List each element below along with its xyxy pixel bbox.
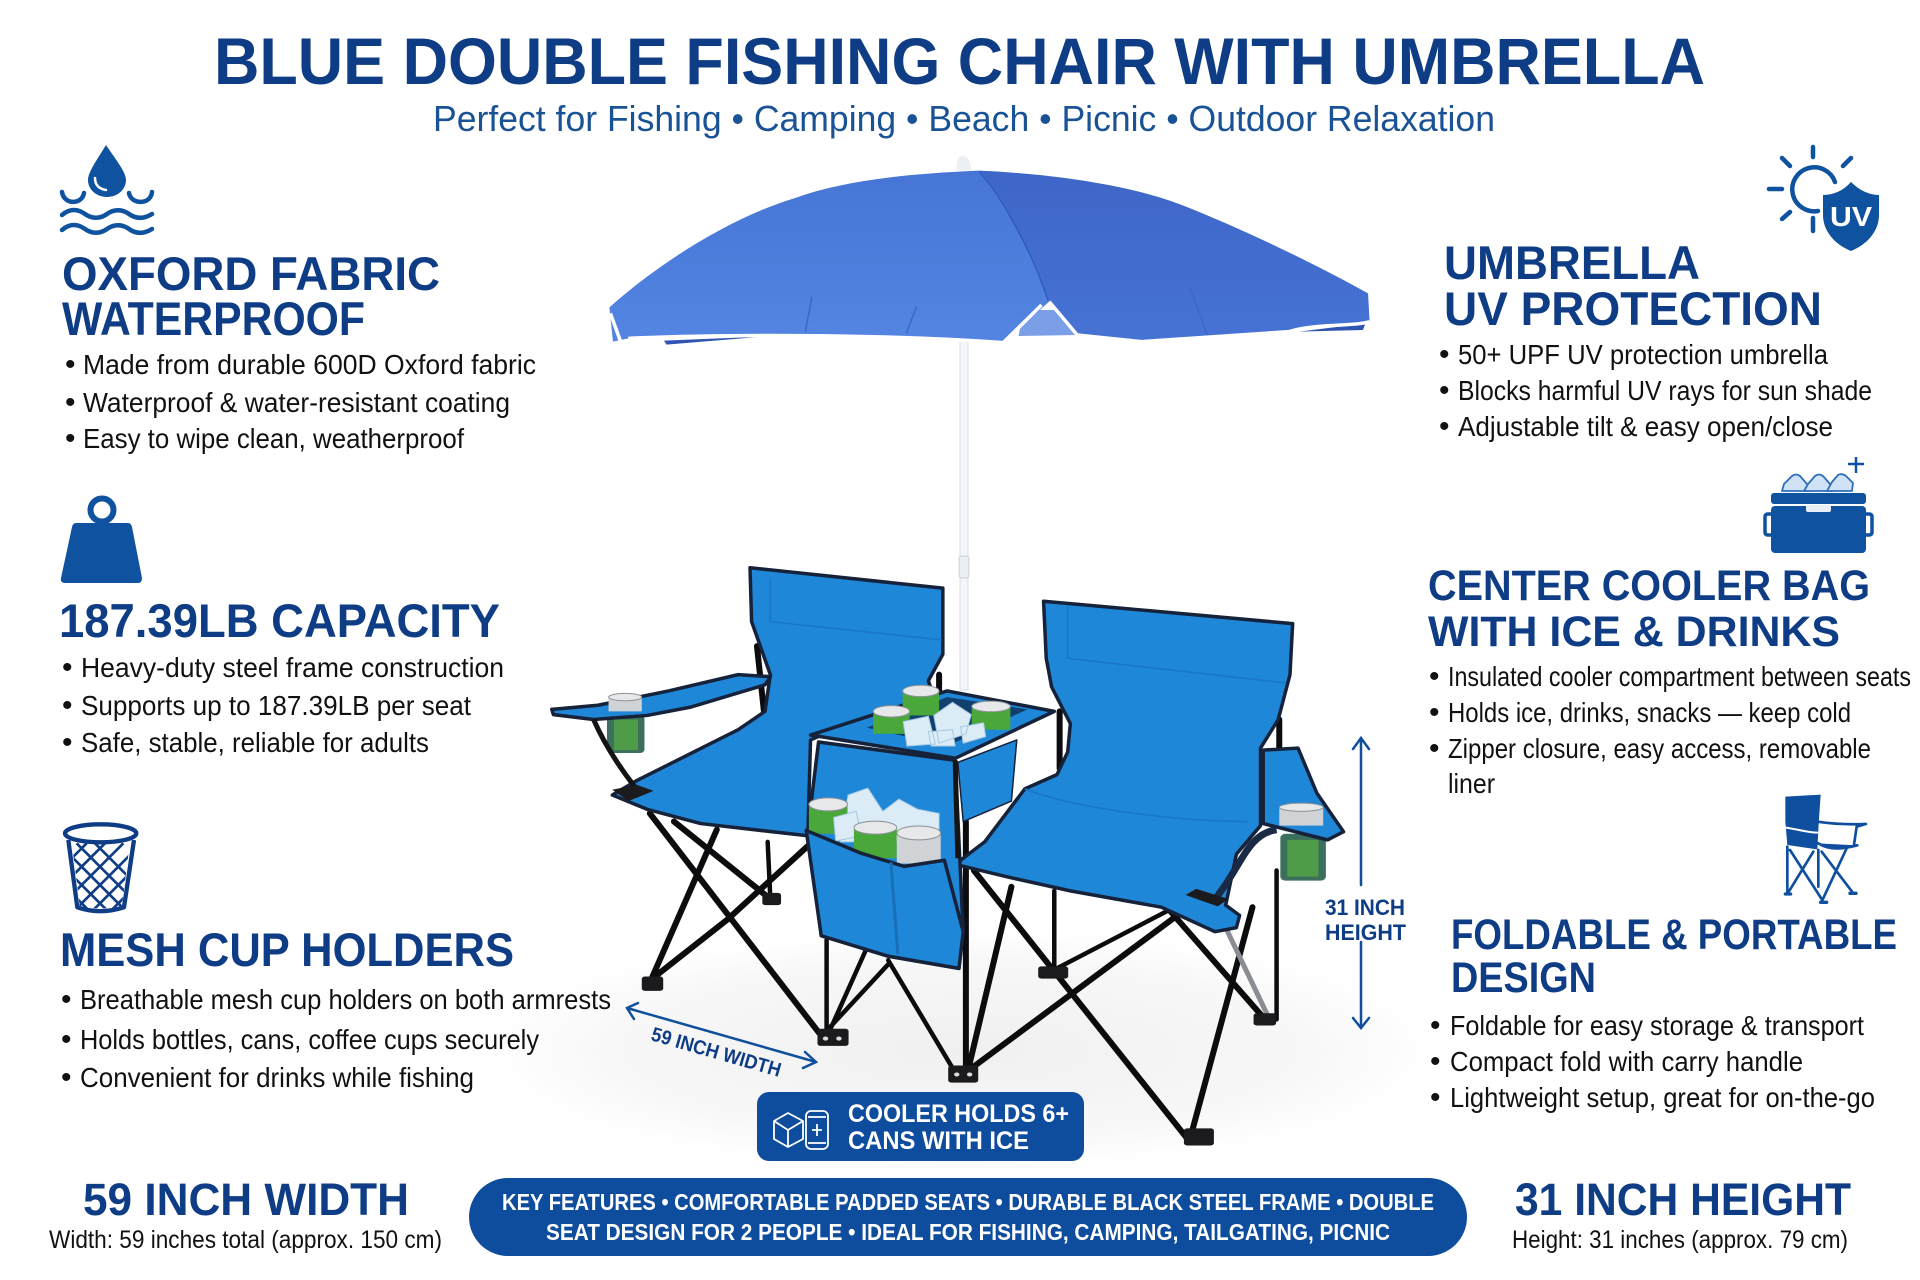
label: 31 inch height — [1325, 895, 1407, 945]
stat: height: Height: 31 inches (approx. 79 cm) — [1512, 1226, 1848, 1254]
bullet list: Safe, stable, reliable for adults — [81, 727, 429, 758]
bullet list: Foldable for easy storage & transport — [1450, 1010, 1864, 1041]
bullet list: • — [1429, 660, 1440, 693]
heading: WITH ICE & DRINKS — [1428, 608, 1840, 656]
heading: DESIGN — [1451, 954, 1596, 1002]
panel: capacity — [59, 498, 504, 759]
panel: center cooler bag — [1428, 457, 1911, 799]
heading — [1451, 911, 1897, 1002]
bullet list: • — [1439, 338, 1450, 371]
bullet list: • — [1439, 374, 1450, 407]
heading: UMBRELLA — [1444, 236, 1700, 289]
bullet list: • — [1429, 732, 1440, 765]
bullet list — [1429, 660, 1911, 799]
stat: width — [49, 1174, 442, 1254]
left can — [609, 693, 642, 711]
icon: sun with UV shield — [1769, 147, 1879, 251]
bullet list: • — [61, 1061, 72, 1094]
icon: weight — [61, 498, 142, 583]
cooler body — [808, 742, 963, 968]
umbrella canopy — [609, 156, 1370, 345]
panel: foldable and portable — [1430, 795, 1897, 1114]
banner: key features — [469, 1178, 1467, 1256]
bullet list: Convenient for drinks while fishing — [80, 1062, 474, 1093]
bullet list: • — [65, 422, 76, 455]
icon: sun with UV shield: UV — [1830, 201, 1872, 232]
panel: umbrella uv protection — [1439, 147, 1879, 443]
stat: height — [1512, 1174, 1851, 1254]
bullet list: Lightweight setup, great for on-the-go — [1450, 1082, 1875, 1113]
bullet list: Holds ice, drinks, snacks — keep cold — [1448, 697, 1851, 728]
panel: oxford fabric waterproof — [62, 145, 536, 455]
bullet list: • — [1429, 696, 1440, 729]
cooler opening with cans and ice — [867, 685, 1027, 746]
stat: height: 31 INCH HEIGHT — [1515, 1174, 1851, 1225]
icon: water drop over waves — [62, 145, 152, 233]
panel: mesh cup holders — [3, 824, 611, 1094]
arrow: height dimension — [1353, 738, 1369, 1028]
bullet list: • — [62, 689, 73, 722]
bullet list: • — [1430, 1081, 1441, 1114]
icon: ice cube and can — [774, 1111, 828, 1149]
banner: key features: SEAT DESIGN FOR 2 PEOPLE • IDEAL FOR FISHING, CAMPING, TAILGATING, PICNIC — [546, 1219, 1390, 1245]
bullet list: Blocks harmful UV rays for sun shade — [1458, 375, 1872, 406]
bullet list: • — [65, 386, 76, 419]
bullet list: • — [1439, 410, 1450, 443]
heading — [1444, 236, 1822, 335]
right armrest — [1263, 748, 1344, 840]
bullet list: • — [1430, 1045, 1441, 1078]
callout: cooler capacity — [757, 1092, 1084, 1161]
label: 59 inch width: 59 INCH WIDTH — [649, 1024, 783, 1082]
bullet list: • — [62, 651, 73, 684]
bullet list — [1430, 1009, 1875, 1114]
frame legs — [650, 646, 1279, 1140]
left cup mesh — [607, 715, 644, 753]
bullet list: Holds bottles, cans, coffee cups securely — [80, 1024, 539, 1055]
bullet list — [61, 983, 611, 1094]
heading: WATERPROOF — [62, 292, 365, 345]
arrow: width dimension — [627, 1003, 816, 1068]
label: 31 inch height: HEIGHT — [1325, 920, 1407, 945]
heading: OXFORD FABRIC — [62, 247, 440, 300]
right can — [1279, 803, 1323, 826]
banner: key features: KEY FEATURES • COMFORTABLE PADDED SEATS • DURABLE BLACK STEEL FRAME • DOUBLE — [502, 1189, 1434, 1215]
bullet list: Supports up to 187.39LB per seat — [81, 690, 471, 721]
bullet list — [1439, 338, 1872, 443]
label: 31 inch height: 31 INCH — [1325, 895, 1405, 920]
bullet list — [65, 348, 536, 455]
right cup mesh — [1280, 834, 1326, 881]
bullet list: Breathable mesh cup holders on both armrests — [80, 984, 611, 1015]
bullet list: Compact fold with carry handle — [1450, 1046, 1803, 1077]
left seat — [612, 568, 943, 836]
stat: width: Width: 59 inches total (approx. 150 cm) — [49, 1226, 442, 1254]
callout: cooler capacity: COOLER HOLDS 6+ — [848, 1100, 1069, 1128]
bullet list: • — [65, 348, 76, 381]
icon: cooler with ice — [1765, 457, 1872, 553]
bullet list: • — [62, 726, 73, 759]
right seat — [955, 601, 1293, 932]
chair illustration — [552, 568, 1344, 1145]
bullet list: liner — [1448, 768, 1495, 799]
stat: width: 59 INCH WIDTH — [83, 1174, 409, 1225]
umbrella pole — [959, 340, 969, 690]
heading: CENTER COOLER BAG — [1428, 562, 1870, 610]
subtitle: Perfect for Fishing • Camping • Beach • Picnic • Outdoor Relaxation — [433, 98, 1495, 139]
bullet list — [62, 651, 504, 759]
bullet list: Heavy-duty steel frame construction — [81, 652, 504, 683]
feet — [642, 893, 1276, 1145]
heading: UV PROTECTION — [1444, 282, 1822, 335]
heading — [1428, 562, 1870, 656]
bullet list: 50+ UPF UV protection umbrella — [1458, 339, 1828, 370]
cooler pocket front — [806, 830, 963, 968]
bullet list: • — [61, 1023, 72, 1056]
cooler pocket with cans and ice — [809, 788, 941, 864]
heading: 187.39LB CAPACITY — [59, 594, 500, 647]
bullet list: Easy to wipe clean, weatherproof — [83, 423, 464, 454]
heading — [62, 247, 440, 345]
bullet list: Adjustable tilt & easy open/close — [1458, 411, 1833, 442]
callout: cooler capacity: CANS WITH ICE — [848, 1127, 1029, 1155]
left armrest — [552, 675, 770, 720]
icon: mesh basket — [62, 822, 138, 914]
icon: folding chair — [1783, 795, 1866, 902]
floor shadow under chair — [480, 930, 1440, 1170]
cooler top — [811, 691, 1054, 758]
title: BLUE DOUBLE FISHING CHAIR WITH UMBRELLA — [214, 24, 1705, 98]
cooler side panel — [958, 740, 1017, 822]
bullet list: Made from durable 600D Oxford fabric — [83, 349, 536, 380]
heading: MESH CUP HOLDERS — [60, 923, 514, 976]
bullet list: • — [61, 983, 72, 1016]
bullet list: Waterproof & water-resistant coating — [83, 387, 510, 418]
bullet list: • — [1430, 1009, 1441, 1042]
